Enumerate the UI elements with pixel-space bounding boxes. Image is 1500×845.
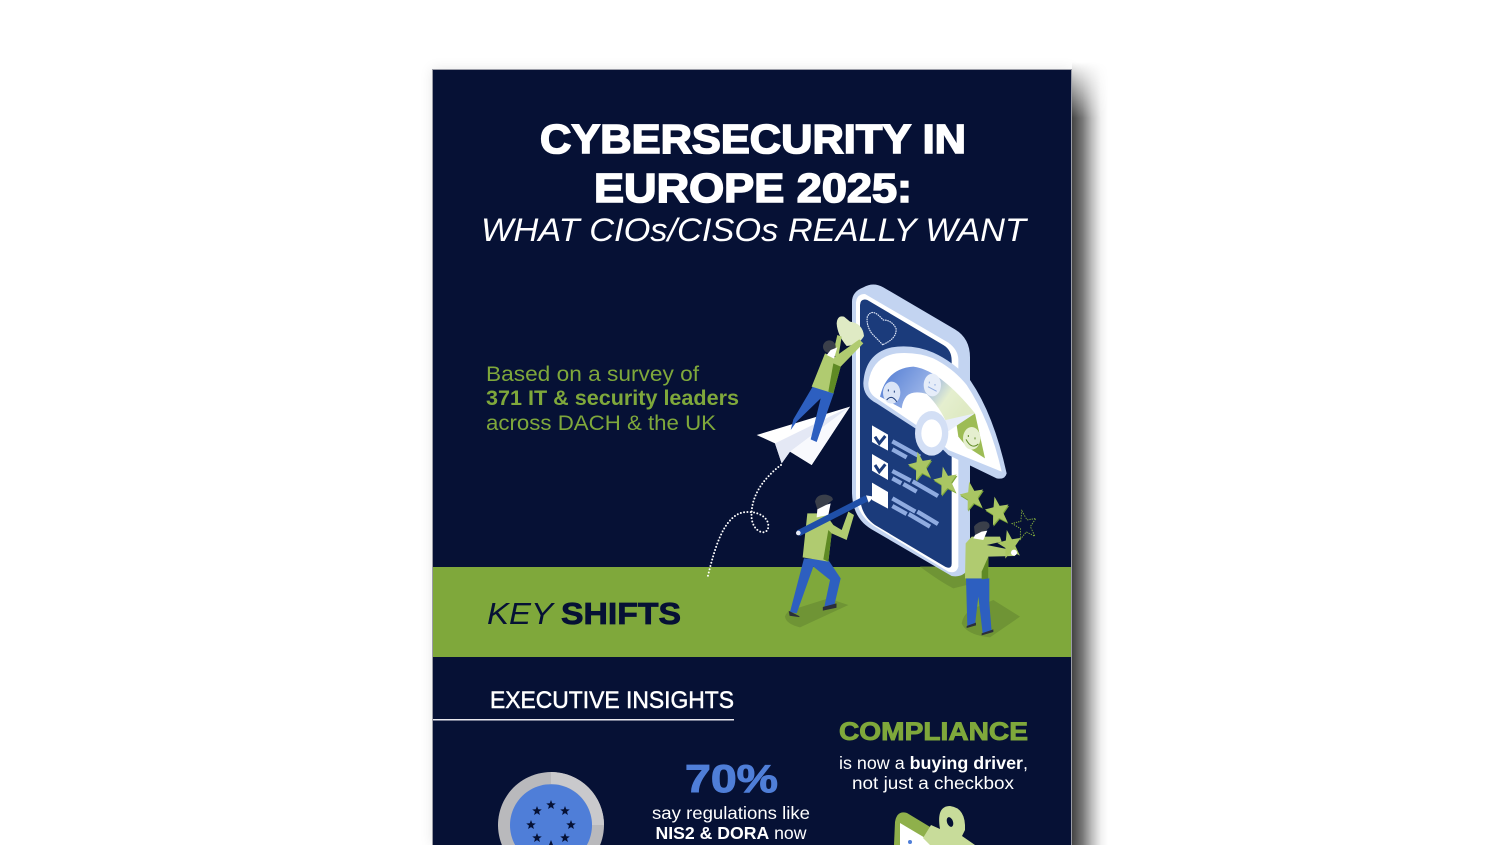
heading: key shifts: SHIFTS xyxy=(561,596,681,631)
heading: key shifts: KEY xyxy=(487,596,555,631)
paper plane xyxy=(757,407,850,465)
phone xyxy=(852,284,1007,576)
panel shadow xyxy=(1072,64,1104,845)
stat: 70 percent: say regulations like xyxy=(652,803,810,823)
green band: key shifts xyxy=(433,567,1071,657)
illustration: phone with feedback gauge and people xyxy=(707,284,1039,637)
panel: dark poster background xyxy=(432,69,1072,845)
stat: compliance: not just a checkbox xyxy=(852,773,1014,793)
title: EUROPE 2025: xyxy=(594,165,912,211)
heading: key shifts xyxy=(487,596,681,631)
stat: 70 percent: NIS2 & DORA now xyxy=(656,823,807,843)
outlined star xyxy=(1010,508,1039,540)
survey text block: across DACH & the UK xyxy=(486,412,716,435)
gauge xyxy=(863,346,1007,479)
dotted heart xyxy=(867,312,896,345)
gauge faces and green sector xyxy=(883,374,985,458)
stat: 70 percent: 70% xyxy=(685,758,778,801)
dotted flight path xyxy=(707,465,781,578)
checklist xyxy=(872,425,938,527)
title xyxy=(481,116,1029,248)
stat: 70 percent xyxy=(652,758,810,843)
stat: compliance: COMPLIANCE xyxy=(839,718,1028,746)
heading: executive insights: EXECUTIVE INSIGHTS xyxy=(490,687,734,714)
gauge needle xyxy=(938,413,975,433)
title: CYBERSECURITY IN xyxy=(540,116,966,162)
person: climbing with heart xyxy=(791,316,864,442)
survey text block xyxy=(486,363,739,435)
survey text block: 371 IT & security leaders xyxy=(486,387,739,410)
person: placing star xyxy=(965,521,1024,635)
stat: compliance xyxy=(839,718,1028,793)
person: holding pencil xyxy=(789,495,874,617)
title: WHAT CIOs/CISOs REALLY WANT xyxy=(481,212,1029,248)
icon: EU flag badge xyxy=(498,772,604,845)
stat: compliance: is now a buying driver, xyxy=(839,753,1028,773)
stars xyxy=(906,449,1013,528)
survey text block: Based on a survey of xyxy=(486,363,699,386)
ground shadows xyxy=(785,567,1020,637)
icon: clipboard xyxy=(894,806,975,845)
